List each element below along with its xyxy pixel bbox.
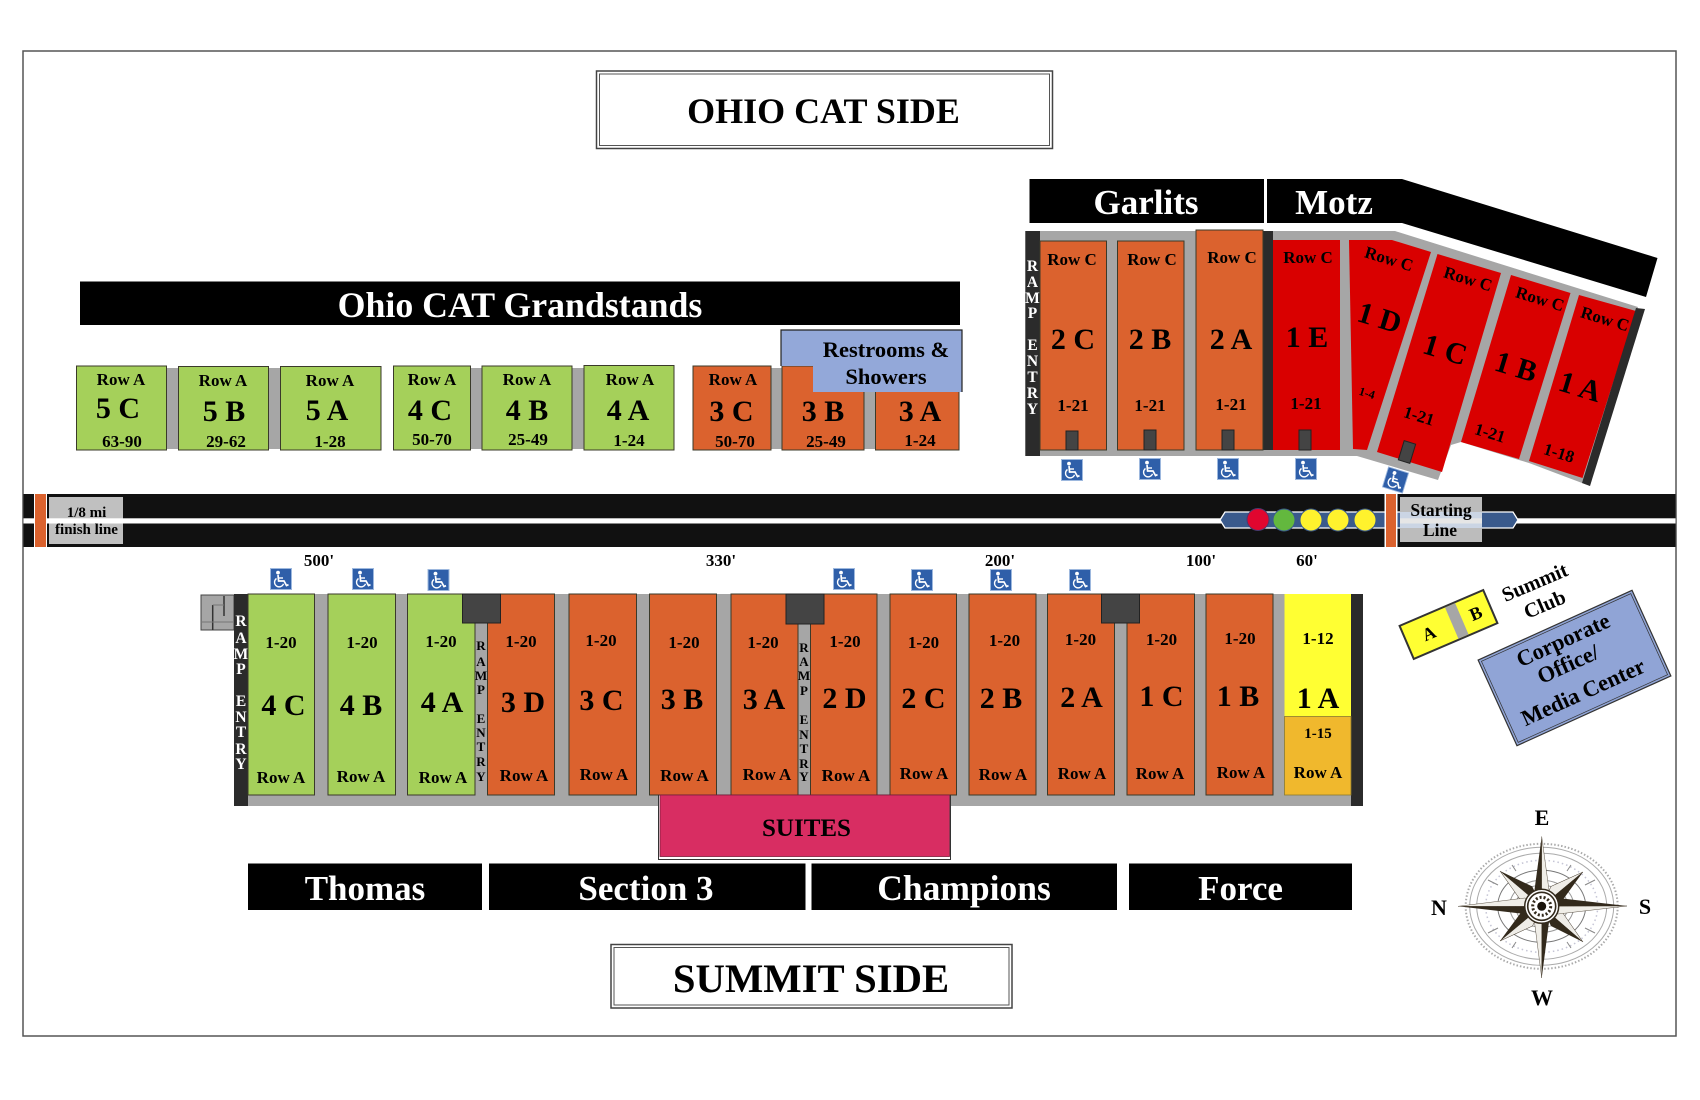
section 3 D: 1-20 bbox=[505, 632, 537, 651]
section 4 C: 50-70 bbox=[412, 430, 452, 449]
section 4 C: Row A bbox=[257, 768, 306, 787]
section 1 A: 1 A bbox=[1297, 682, 1340, 715]
icon: wheelchair 2 C bbox=[1062, 460, 1082, 480]
section 1 A bbox=[1529, 295, 1636, 478]
section 2 A: 2 A bbox=[1210, 323, 1253, 356]
heading: Motz: Motz bbox=[1295, 183, 1373, 222]
section 3 B: 1-20 bbox=[668, 633, 700, 652]
ramp tower 3 bbox=[1102, 594, 1140, 623]
compass letter W: W bbox=[1531, 985, 1553, 1010]
section 1 A: Row A bbox=[1294, 763, 1343, 782]
heading: Garlits bbox=[1030, 179, 1264, 223]
section 2 D: 1-20 bbox=[829, 632, 861, 651]
section 1 E bbox=[1273, 240, 1340, 450]
section 3 A bbox=[876, 366, 959, 450]
section 1 A: 1-18 bbox=[1541, 439, 1577, 467]
section 3 B: 3 B bbox=[661, 683, 703, 716]
section 1 B: 1-20 bbox=[1224, 629, 1256, 648]
section 1 A: 1-12 bbox=[1302, 629, 1334, 648]
section 4 B bbox=[328, 594, 396, 795]
section 2 B: Row A bbox=[979, 765, 1028, 784]
section 3 B: 25-49 bbox=[806, 432, 846, 451]
section 2 C bbox=[1040, 241, 1106, 450]
section 5 C: Row A bbox=[97, 370, 146, 389]
heading: Thomas: Thomas bbox=[305, 869, 425, 908]
panel: Garlits and Motz grandstand sections bbox=[1025, 230, 1645, 486]
section 2 B bbox=[969, 594, 1036, 795]
section 2 B: 2 B bbox=[980, 682, 1022, 715]
icon: wheelchair 4 A bbox=[428, 570, 449, 590]
section 2 B bbox=[1118, 241, 1184, 450]
section 3 C bbox=[693, 366, 771, 451]
section 5 A: 5 A bbox=[306, 394, 349, 427]
section 1 C: 1 C bbox=[1419, 328, 1471, 372]
section 3 B bbox=[650, 594, 716, 795]
heading: Ohio CAT Grandstands bbox=[80, 282, 960, 325]
section 3 A: 3 A bbox=[899, 395, 942, 428]
section 3 B bbox=[782, 366, 864, 451]
gray walkway bbox=[248, 594, 1351, 806]
icon: wheelchair 1 E bbox=[1296, 458, 1316, 480]
Corporate Office / Media Center building bbox=[1478, 590, 1671, 746]
section 4 A: Row A bbox=[606, 370, 655, 389]
icon: wheelchair 4 C bbox=[270, 568, 292, 590]
section 4 C: 1-20 bbox=[265, 633, 297, 652]
section 1 C: Row A bbox=[1136, 764, 1185, 783]
section 2 C: 2 C bbox=[901, 682, 946, 715]
section 2 C: Row A bbox=[900, 764, 949, 783]
title: Summit side bbox=[611, 944, 1012, 1008]
starting line label: Starting bbox=[1410, 500, 1472, 520]
section 3 D: Row A bbox=[500, 766, 549, 785]
section 4 C bbox=[248, 594, 314, 795]
section 1 E: 1-21 bbox=[1290, 394, 1322, 413]
christmas tree starting lights bbox=[1220, 508, 1518, 531]
compass rings bbox=[1466, 844, 1618, 969]
section 5 B: Row A bbox=[199, 371, 248, 390]
section 4 B: Row A bbox=[337, 767, 386, 786]
suites bbox=[658, 795, 950, 860]
compass letter N: N bbox=[1431, 895, 1447, 920]
section 1 B: Row C bbox=[1514, 283, 1566, 315]
section 2 D: 2 D bbox=[822, 682, 867, 715]
section 2 A: Row C bbox=[1207, 248, 1257, 267]
label: Corporate Office / Media Center: Corporate bbox=[1512, 608, 1614, 672]
distance markers bbox=[304, 551, 1318, 570]
section 2 C bbox=[890, 594, 956, 795]
drag strip track bbox=[24, 494, 1676, 547]
finish line label: 1/8 mi bbox=[67, 505, 106, 521]
section 3 C: Row A bbox=[580, 765, 629, 784]
section 5 A: 1-28 bbox=[314, 432, 346, 451]
icon: wheelchair 1 C bbox=[1382, 467, 1409, 493]
section 2 A: Row A bbox=[1058, 764, 1107, 783]
section 2 D: Row A bbox=[822, 766, 871, 785]
section 2 A bbox=[1196, 230, 1263, 450]
section 4 C bbox=[394, 366, 470, 450]
section 1 D: 1 D bbox=[1354, 296, 1405, 340]
heading: Champions: Champions bbox=[877, 868, 1051, 908]
icon: wheelchair 2 D bbox=[834, 568, 854, 590]
callout: Restrooms and Showers bbox=[781, 330, 962, 392]
section 4 B: 25-49 bbox=[508, 430, 548, 449]
title: Summit side: SUMMIT SIDE bbox=[673, 956, 949, 1001]
section 2 A: 2 A bbox=[1060, 681, 1103, 714]
section 3 C: Row A bbox=[709, 370, 758, 389]
label: Corporate Office / Media Center bbox=[1512, 608, 1649, 731]
ramp entry: centre: RAMP ENTRY bbox=[798, 640, 810, 784]
section 1 B: 1 B bbox=[1217, 680, 1259, 713]
section 1 D: Row C bbox=[1363, 243, 1415, 275]
section 1 B bbox=[1461, 275, 1570, 459]
label: Summit Club: Club bbox=[1521, 586, 1569, 624]
section 2 D bbox=[810, 594, 877, 795]
section 3 A bbox=[731, 594, 798, 795]
section 4 A: 1-24 bbox=[613, 431, 645, 450]
section 1 E: Row C bbox=[1283, 248, 1333, 267]
distance markers: 100' bbox=[1186, 551, 1216, 570]
section 2 C: 1-20 bbox=[908, 633, 939, 652]
heading: Section 3: Section 3 bbox=[578, 869, 714, 908]
section 3 A: 1-20 bbox=[747, 633, 779, 652]
section 4 C: 4 C bbox=[261, 689, 306, 722]
section 3 A: 3 A bbox=[743, 683, 786, 716]
section 3 C: 3 C bbox=[709, 395, 754, 428]
section 2 A: 1-21 bbox=[1215, 395, 1247, 414]
ramp tower 1 bbox=[462, 594, 500, 623]
icon: wheelchair 4 B bbox=[352, 568, 374, 590]
section 1 C: Row C bbox=[1442, 263, 1494, 295]
section 4 A bbox=[408, 594, 475, 795]
icon: wheelchair 2 A bbox=[1218, 458, 1238, 480]
heading: Force: Force bbox=[1198, 869, 1283, 908]
label: Corporate Office / Media Center: Media Center bbox=[1517, 653, 1649, 731]
section 3 A: Row A bbox=[743, 765, 792, 784]
section 3 B: 3 B bbox=[802, 395, 844, 428]
gray walkway bbox=[1025, 231, 1638, 486]
section 4 B: 4 B bbox=[506, 394, 548, 427]
section 1 C: 1 C bbox=[1139, 680, 1184, 713]
compass star points bbox=[1458, 836, 1627, 978]
Summit Club building: A bbox=[1419, 622, 1439, 645]
section 2 A: 1-20 bbox=[1065, 630, 1096, 649]
distance markers: 200' bbox=[985, 551, 1015, 570]
section 1 A: Row C bbox=[1579, 303, 1631, 335]
section 1 A: 1 A bbox=[1555, 365, 1605, 409]
heading: Ohio CAT Grandstands: Ohio CAT Grandstands bbox=[338, 285, 702, 325]
starting line marker bbox=[1384, 494, 1398, 547]
ramp entry: left: RAMP ENTRY bbox=[234, 613, 249, 773]
section 1 C bbox=[1127, 594, 1194, 795]
distance markers: 330' bbox=[706, 551, 736, 570]
Summit Club building bbox=[1400, 590, 1497, 659]
section 1 D: 1-4 bbox=[1357, 384, 1377, 402]
finish line marker bbox=[34, 494, 47, 547]
ramp tower 2 bbox=[786, 594, 824, 624]
icon: wheelchair 2 B bbox=[1140, 458, 1160, 480]
section 5 A: Row A bbox=[306, 371, 355, 390]
section 3 C: 1-20 bbox=[585, 631, 617, 650]
heading: Garlits: Garlits bbox=[1094, 183, 1198, 222]
section 3 C: 50-70 bbox=[715, 432, 755, 451]
ramp entry: Garlits bbox=[1025, 231, 1040, 456]
heading: Force bbox=[1129, 864, 1352, 910]
section 2 C: 2 C bbox=[1051, 323, 1095, 356]
section 4 A: Row A bbox=[419, 768, 468, 787]
ramp entry: Garlits: RAMP ENTRY bbox=[1025, 258, 1040, 418]
heading: Thomas bbox=[248, 864, 482, 910]
section 3 D: 3 D bbox=[501, 686, 545, 719]
section 1 A bbox=[1284, 594, 1351, 795]
section 4 A: 1-20 bbox=[425, 632, 457, 651]
section 4 B: Row A bbox=[503, 370, 552, 389]
section 4 C: Row A bbox=[408, 370, 457, 389]
section 4 A: 4 A bbox=[421, 686, 464, 719]
section 1 D bbox=[1349, 240, 1431, 450]
title: Ohio CAT side bbox=[596, 71, 1052, 148]
icon: wheelchair 2 B bbox=[990, 570, 1012, 590]
section 5 B: 29-62 bbox=[206, 432, 246, 451]
section 3 A: 1-24 bbox=[904, 431, 936, 450]
compass rose bbox=[1458, 836, 1627, 978]
section 4 B bbox=[482, 366, 572, 450]
section 1 C: 1-20 bbox=[1146, 630, 1177, 649]
callout: Restrooms and Showers: Showers bbox=[845, 364, 927, 389]
section 2 B: 2 B bbox=[1129, 323, 1171, 356]
finish line label bbox=[49, 497, 123, 544]
section 1 B: 1-21 bbox=[1472, 419, 1508, 447]
heading: Motz bbox=[1267, 179, 1658, 297]
distance markers: 500' bbox=[304, 551, 334, 570]
callout: Restrooms and Showers: Restrooms & bbox=[823, 337, 949, 362]
label: Summit Club: Summit bbox=[1499, 559, 1571, 607]
section 3 C: 3 C bbox=[579, 684, 624, 717]
suites: SUITES bbox=[762, 815, 851, 842]
section 5 C: 63-90 bbox=[102, 432, 142, 451]
section 1 A: 1-15 bbox=[1304, 726, 1332, 742]
distance markers: 60' bbox=[1296, 551, 1318, 570]
section 5 C: 5 C bbox=[96, 392, 140, 425]
icon: wheelchair 2 C bbox=[912, 570, 932, 590]
section 5 C bbox=[76, 366, 166, 451]
section 1 C: 1-21 bbox=[1401, 402, 1437, 430]
section 2 B: 1-21 bbox=[1134, 396, 1166, 415]
starting line label: Line bbox=[1423, 520, 1457, 540]
section 1 B bbox=[1206, 594, 1273, 795]
section 2 C: Row C bbox=[1047, 250, 1097, 269]
heading: Champions bbox=[812, 864, 1117, 910]
section 1 B: Row A bbox=[1217, 763, 1266, 782]
section 1 C bbox=[1377, 254, 1501, 472]
panel: Summit side grandstand sections bbox=[201, 594, 1363, 806]
section 2 A bbox=[1048, 594, 1114, 795]
section 3 B: Row A bbox=[660, 766, 710, 785]
section 3 C bbox=[569, 594, 636, 795]
icon: wheelchair 2 A bbox=[1070, 570, 1090, 590]
section 5 B: 5 B bbox=[203, 395, 245, 428]
heading: Section 3 bbox=[489, 864, 806, 910]
section 4 C: 4 C bbox=[408, 394, 452, 427]
finish line label: finish line bbox=[55, 522, 118, 538]
section 5 A bbox=[280, 366, 381, 451]
section 4 A bbox=[584, 366, 674, 450]
compass hub bbox=[1525, 889, 1559, 923]
section 2 C: 1-21 bbox=[1057, 396, 1089, 415]
compass letter E: E bbox=[1535, 805, 1549, 830]
section 4 A: 4 A bbox=[607, 394, 650, 427]
label: Corporate Office / Media Center: Office/ bbox=[1533, 639, 1603, 689]
starting line label bbox=[1400, 497, 1482, 542]
section 3 D bbox=[488, 594, 554, 795]
compass letter S: S bbox=[1639, 894, 1651, 919]
section 2 B: 1-20 bbox=[989, 631, 1020, 650]
section 5 B bbox=[178, 366, 268, 451]
ramp entry: centre left: RAMP ENTRY bbox=[475, 638, 487, 784]
panel: Ohio CAT grandstand sections bbox=[76, 366, 959, 451]
section 2 B: Row C bbox=[1127, 250, 1177, 269]
section 1 E: 1 E bbox=[1286, 321, 1328, 354]
Summit Club building: B bbox=[1466, 602, 1485, 625]
section 4 B: 4 B bbox=[340, 689, 382, 722]
title: Ohio CAT side: OHIO CAT SIDE bbox=[687, 91, 960, 131]
ramp stairs icon bbox=[201, 595, 234, 630]
section 4 B: 1-20 bbox=[346, 633, 378, 652]
section 1 B: 1 B bbox=[1491, 345, 1541, 389]
